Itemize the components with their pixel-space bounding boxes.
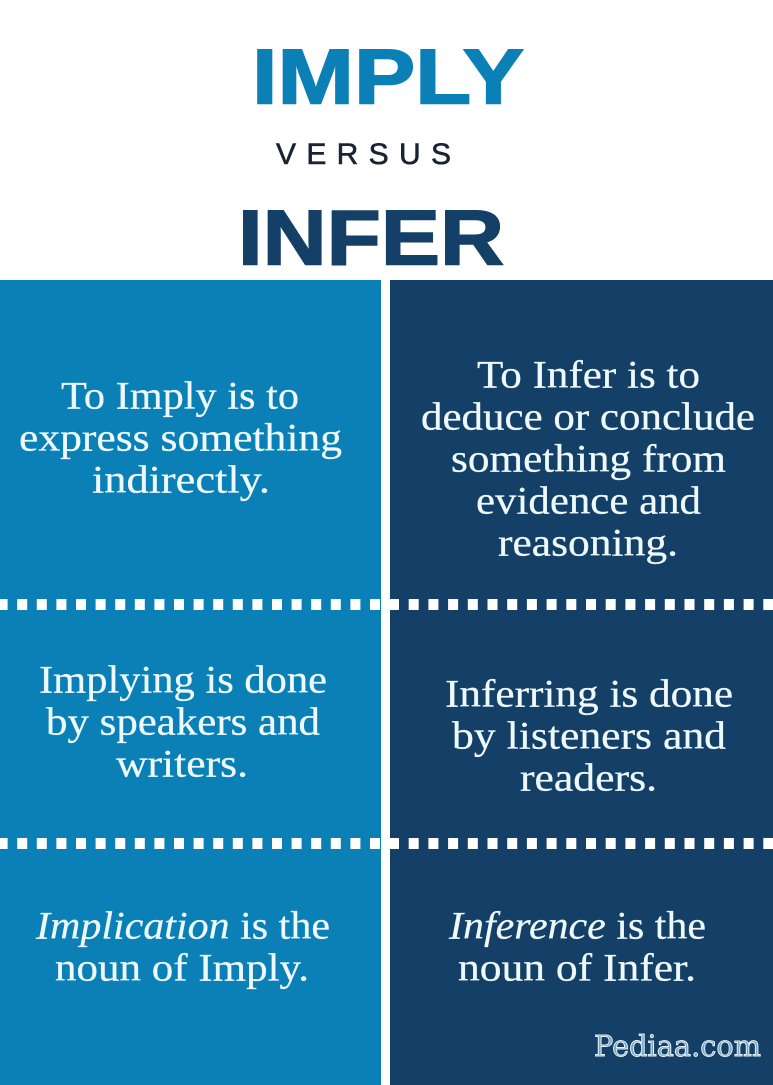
text: Imply users: by speakers and [46,700,321,744]
text: Infer users: readers. [520,756,657,800]
text: Imply users: Implying is done [39,658,327,702]
text: Imply users: writers. [116,742,248,786]
text: Imply definition: indirectly. [92,458,270,502]
text: Infer noun [448,904,706,990]
text: Imply definition [19,374,342,502]
text: Imply noun: noun of Imply. [55,946,309,990]
text: Infer noun: Inference is the [448,904,706,948]
logo: Pediaa.com: Pediaa.com [594,1029,761,1063]
text: Infer definition: reasoning. [498,522,678,564]
text: Infer definition: something from [451,438,726,480]
text: Infer definition: evidence and [476,480,702,522]
panel: Imply column [0,280,381,1085]
text: Infer users: by listeners and [452,714,727,758]
panel: Infer column [389,280,773,1085]
subtitle: VERSUS: VERSUS [276,138,451,171]
title: INFER: INFER [238,194,504,282]
text: Infer users: Inferring is done [445,672,733,716]
text: Imply noun [35,904,330,990]
text: Imply definition: To Imply is to [61,374,299,418]
text: Imply noun: Implication is the [35,904,330,948]
text: Imply definition: express something [19,416,342,460]
text: Infer definition: deduce or conclude [421,396,755,438]
text: Infer users [445,672,733,800]
title: IMPLY: IMPLY [252,32,524,120]
text: Infer definition [421,354,755,564]
text: Infer noun: noun of Infer. [458,946,696,990]
text: Imply users [39,658,327,786]
text: Infer definition: To Infer is to [477,354,700,396]
